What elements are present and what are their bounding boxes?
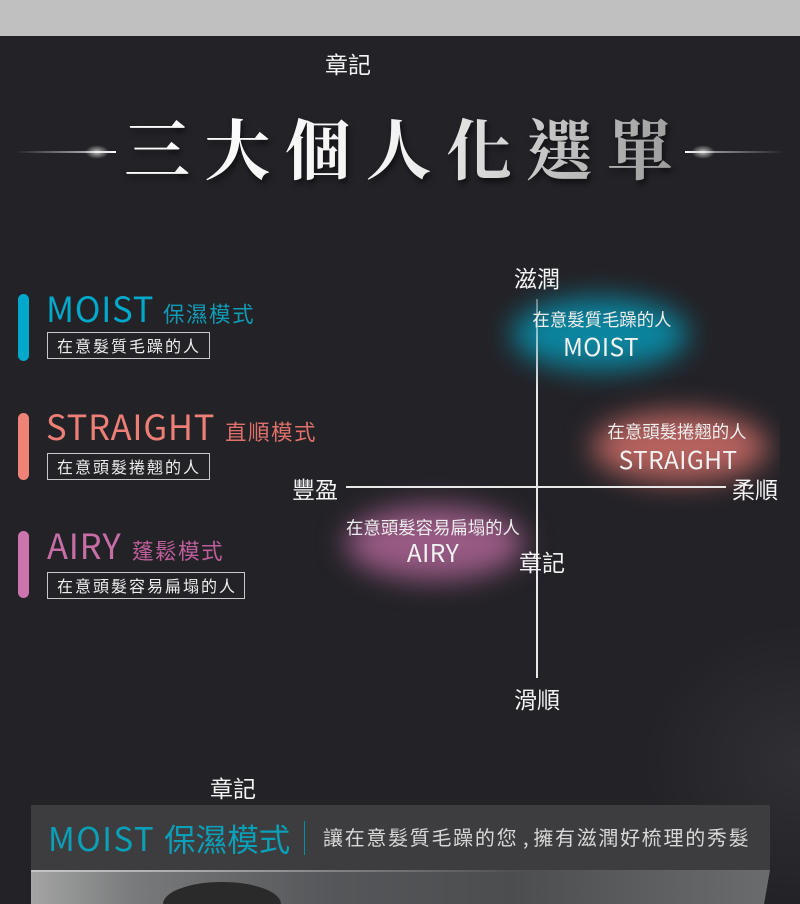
chart: positioning map (292, 260, 780, 715)
stamp label middle: 章記 (519, 544, 565, 578)
legend: straight (18, 400, 317, 480)
title left flare (15, 151, 116, 153)
moist section header (31, 805, 770, 870)
airy descriptor box: 在意頭髮容易扁塌的人 (57, 573, 237, 597)
title right glow (691, 145, 715, 159)
axis label left: 豐盈 (292, 471, 338, 505)
hair silhouette (163, 882, 281, 904)
moist descriptor box: 在意髮質毛躁的人 (57, 333, 201, 357)
straight descriptor box: 在意頭髮捲翹的人 (57, 454, 201, 478)
airy blob name: AIRY (407, 535, 459, 570)
section title: MOIST 保濕模式 (48, 813, 290, 861)
top grey band (0, 0, 800, 36)
straight bar (18, 413, 29, 480)
straight name: STRAIGHT (46, 400, 215, 450)
photo top highlight (31, 870, 531, 872)
vertical axis (536, 299, 538, 678)
moist bar (18, 294, 29, 361)
horizontal axis (346, 486, 726, 488)
stamp label top: 章記 (325, 46, 371, 80)
moist mode: 保濕模式 (163, 298, 255, 329)
section tagline: 讓在意髮質毛躁的您 擁有滋潤好梳理的秀髮 (323, 822, 750, 851)
stamp label bottom: 章記 (210, 770, 256, 804)
blob: moist (512, 298, 688, 370)
straight blob text: 在意頭髮捲翹的人 (607, 419, 747, 444)
product photo strip (31, 870, 770, 904)
airy blob text: 在意頭髮容易扁塌的人 (346, 515, 520, 540)
legend: airy (18, 519, 245, 599)
title (20, 98, 780, 193)
title right flare (685, 151, 785, 153)
moist blob text: 在意髮質毛躁的人 (532, 307, 672, 332)
airy mode: 蓬鬆模式 (132, 535, 224, 566)
background lighter corner (640, 620, 800, 904)
axis label right: 柔順 (732, 471, 778, 505)
axis label bottom: 滑順 (514, 681, 560, 715)
blob clip area (330, 278, 780, 599)
section divider (304, 821, 305, 855)
title glyphs: 三大個人化選單 (124, 98, 688, 193)
straight mode: 直順模式 (225, 416, 317, 447)
straight blob name: STRAIGHT (619, 442, 737, 477)
blob: straight (592, 412, 768, 482)
legend: moist (18, 282, 255, 361)
section tagline: , (523, 822, 529, 851)
airy bar (18, 531, 29, 598)
moist name: MOIST (46, 282, 154, 332)
moist blob name: MOIST (563, 329, 639, 364)
airy name: AIRY (47, 519, 122, 569)
blob: airy (346, 506, 524, 580)
axis label top: 滋潤 (514, 260, 560, 294)
title left glow (85, 145, 109, 159)
